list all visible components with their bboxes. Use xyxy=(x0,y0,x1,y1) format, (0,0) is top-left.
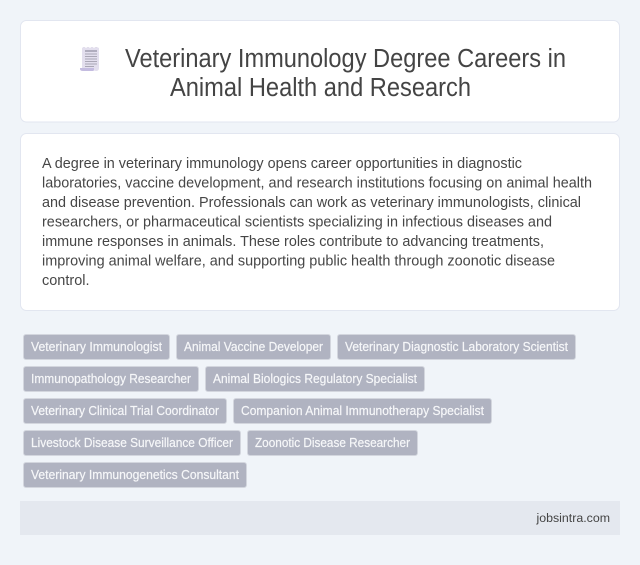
tag: Companion Animal Immunotherapy Specialist xyxy=(241,404,484,418)
description text xyxy=(42,156,592,289)
panel: header xyxy=(20,20,620,122)
icon: document scroll xyxy=(80,47,99,71)
tag xyxy=(24,430,240,456)
description text: control. xyxy=(42,273,90,289)
tag: Veterinary Clinical Trial Coordinator xyxy=(31,404,219,418)
career tags xyxy=(24,334,576,488)
tag: Veterinary Immunologist xyxy=(31,340,162,354)
tag xyxy=(248,430,418,456)
tag xyxy=(24,366,198,392)
panel: description xyxy=(20,134,620,310)
description text: and disease prevention. Professionals can work as veterinary immunologists, clinical xyxy=(42,195,581,211)
footer xyxy=(20,501,620,535)
tag: Livestock Disease Surveillance Officer xyxy=(31,436,233,450)
description text: A degree in veterinary immunology opens career opportunities in diagnostic xyxy=(42,156,522,172)
description text: laboratories, vaccine development, and research institutions focusing on animal health xyxy=(42,176,592,192)
title: Veterinary Immunology Degree Careers in xyxy=(125,45,566,73)
tag xyxy=(24,398,226,424)
tag: Veterinary Diagnostic Laboratory Scientist xyxy=(345,340,568,354)
tag xyxy=(24,462,246,488)
tag: Zoonotic Disease Researcher xyxy=(255,436,410,450)
tag xyxy=(176,334,330,360)
tag xyxy=(338,334,576,360)
tag xyxy=(234,398,492,424)
tag: Veterinary Immunogenetics Consultant xyxy=(31,468,239,482)
footer credit: jobsintra.com xyxy=(535,511,610,525)
title xyxy=(125,45,566,102)
title: Animal Health and Research xyxy=(170,74,471,102)
tag xyxy=(24,334,170,360)
description text: researchers, or pharmaceutical scientists specializing in infectious diseases and xyxy=(42,214,552,230)
tag: Animal Vaccine Developer xyxy=(184,340,323,354)
tag xyxy=(206,366,424,392)
description text: immune responses in animals. These roles contribute to advancing treatments, xyxy=(42,234,544,250)
description text: improving animal welfare, and supporting public health through zoonotic disease xyxy=(42,254,555,270)
tag: Animal Biologics Regulatory Specialist xyxy=(213,372,417,386)
tag: Immunopathology Researcher xyxy=(31,372,191,386)
